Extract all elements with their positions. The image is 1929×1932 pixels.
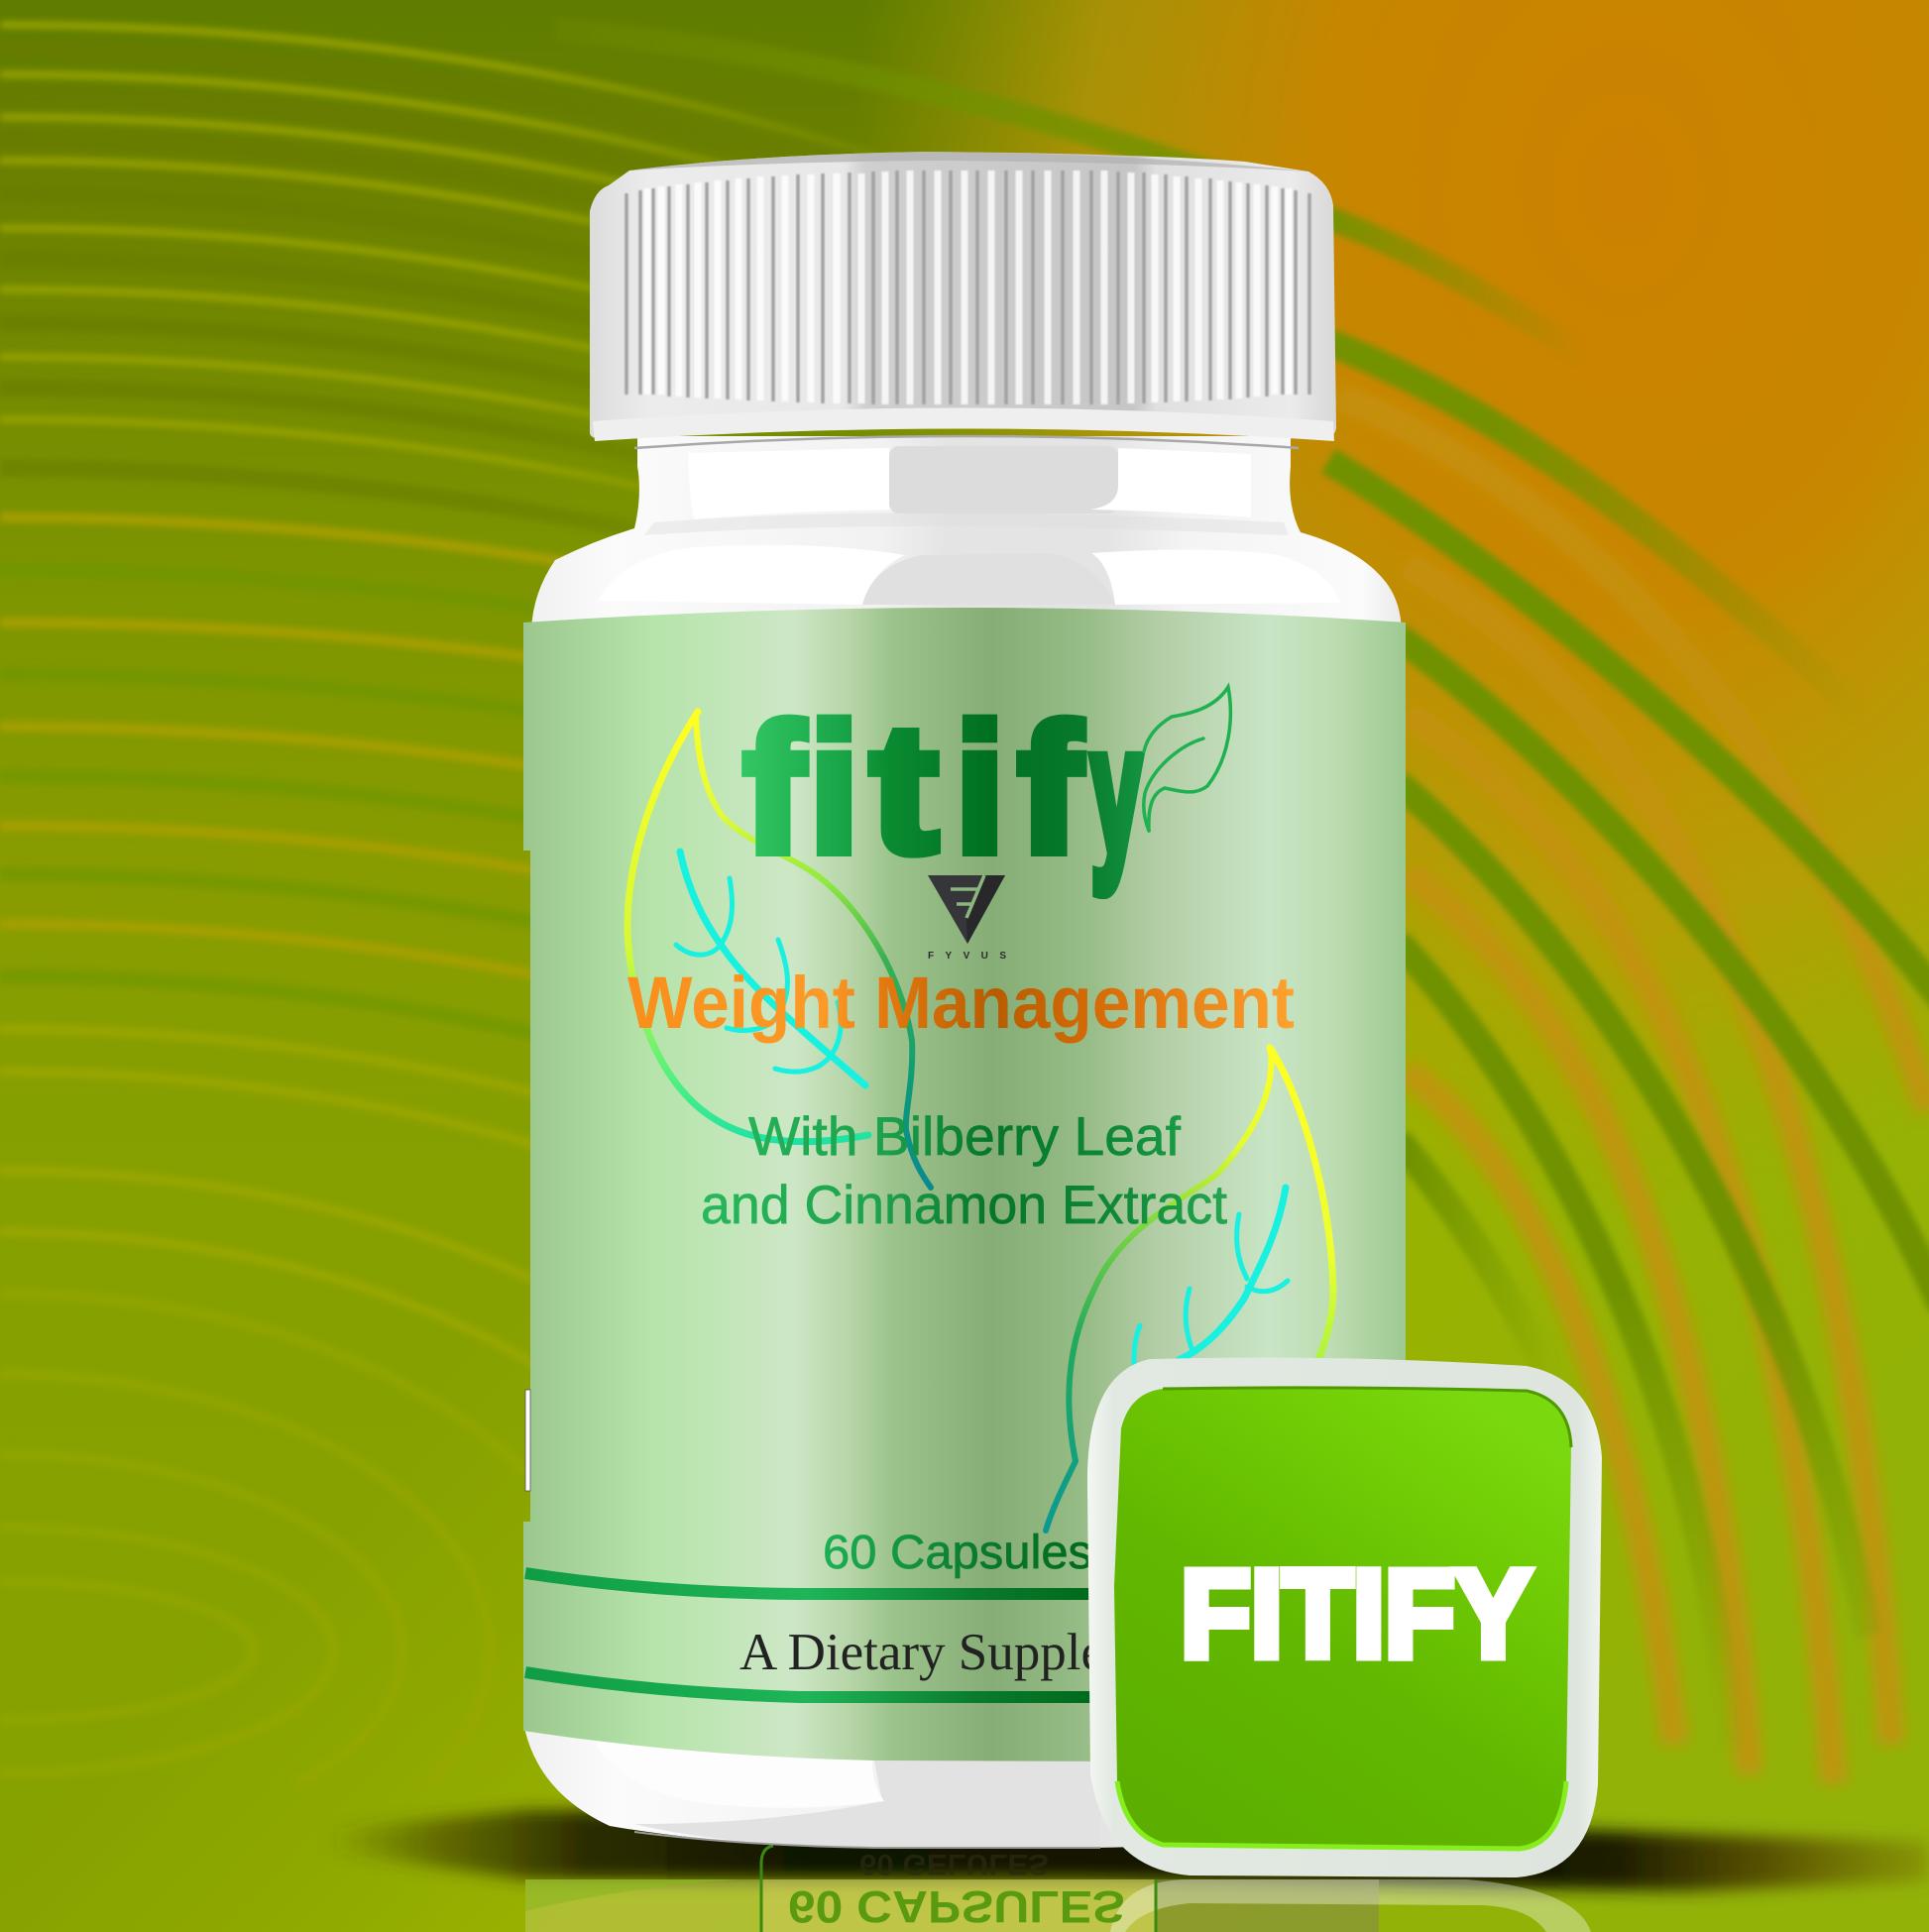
badge wordmark: FITIFY (1181, 1545, 1532, 1683)
flipped text: 60 GELULES: 60 GELULES (859, 1848, 1049, 1880)
supplement bottle: y (1091, 689, 1141, 893)
capsule count: 60 Capsules (823, 1527, 1092, 1579)
brand name: fitify (743, 686, 1141, 893)
subheading: ingredients: and Cinnamon Extract (701, 1174, 1227, 1235)
logo caption: FYVUS (928, 951, 1006, 962)
brand name: fitify: f (743, 686, 805, 890)
large leaf: right (1046, 1048, 1333, 1531)
heading: Weight Management: Weight Management (627, 962, 1295, 1044)
label stripes (525, 1573, 1100, 1697)
badge frame (1087, 1358, 1602, 1877)
flipped text: 60 CAPSULES: 60 CAPSULES (788, 1881, 1125, 1932)
FYVUS logo (928, 875, 1006, 962)
leaf veins: left (676, 852, 865, 1085)
floor shadow (327, 1810, 1929, 1891)
neck highlights (598, 446, 1341, 605)
badge face (1114, 1388, 1571, 1849)
FITIFY badge (1087, 1358, 1602, 1877)
subheading: ingredients (701, 1105, 1227, 1235)
supplement line: A Dietary Supplement (739, 1624, 1209, 1681)
brand name: fitify: t (870, 686, 938, 890)
green label (523, 608, 1406, 1762)
subheading: ingredients: With Bilberry Leaf (748, 1105, 1182, 1167)
large leaf: left (627, 712, 931, 1188)
supplement bottle (523, 152, 1406, 1848)
brand name: fitify: f (1018, 686, 1082, 890)
bottom base shading (595, 1740, 1100, 1848)
leaf veins: right (1134, 1188, 1288, 1363)
bottle reflection (525, 1846, 1591, 1932)
bottle body (525, 436, 1402, 1848)
icon: small leaf beside logo (1144, 687, 1230, 831)
brand name: fitify: i (955, 686, 1005, 890)
brand name: fitify: i (809, 686, 859, 890)
cap (590, 152, 1336, 448)
